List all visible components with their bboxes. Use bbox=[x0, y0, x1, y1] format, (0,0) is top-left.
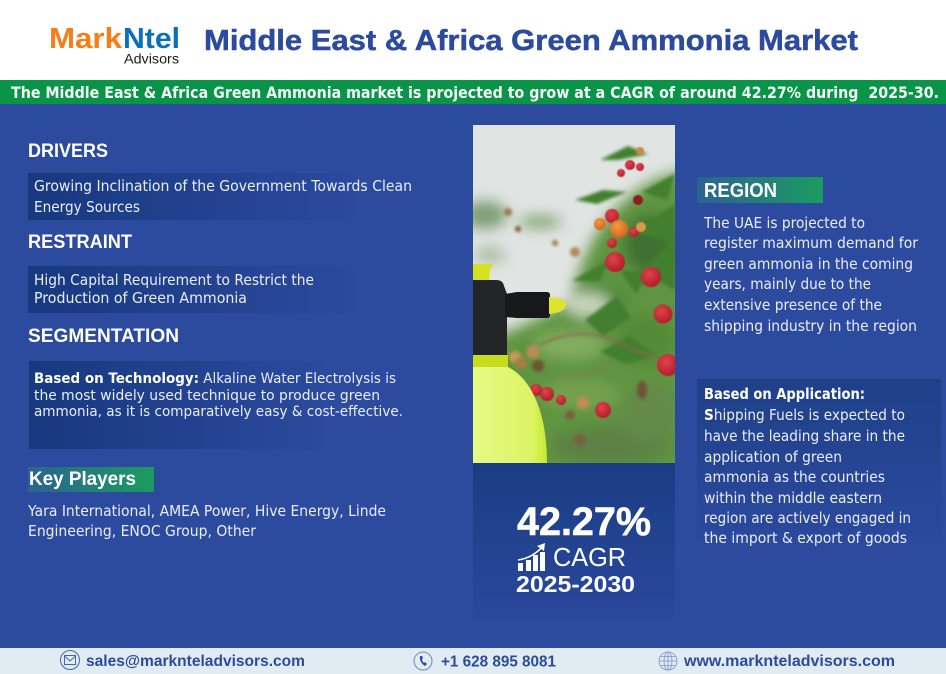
email address: sales@marknteladvisors.com bbox=[86, 653, 305, 670]
region text bbox=[703, 214, 919, 335]
heading: region bbox=[697, 177, 823, 203]
CAGR value: 42.27% bbox=[517, 500, 651, 544]
footer bbox=[0, 648, 946, 674]
title: Middle East & Africa Green Ammonia Market bbox=[204, 25, 858, 57]
panel: region bbox=[697, 177, 919, 335]
segmentation text box: Based on Technology: Alkaline Water Electrolysis is bbox=[34, 371, 396, 387]
logo: MarkNtel Advisors: Mark bbox=[49, 23, 123, 55]
region text: shipping industry in the region bbox=[704, 317, 917, 335]
panel: CAGR stat bbox=[473, 463, 675, 618]
heading: drivers: DRIVERS bbox=[28, 141, 108, 162]
panel: application: have the leading share in the bbox=[704, 427, 905, 445]
restraint text box bbox=[28, 266, 360, 313]
icon: phone bbox=[414, 652, 432, 670]
region text: extensive presence of the bbox=[704, 296, 882, 314]
restraint text box: High Capital Requirement to Restrict the bbox=[34, 271, 314, 289]
panel: application: region are actively engaged in bbox=[704, 509, 911, 527]
icon: email bbox=[60, 650, 80, 670]
region text: years, mainly due to the bbox=[704, 275, 871, 293]
key players list: Yara International, AMEA Power, Hive Energy, Linde bbox=[27, 502, 386, 520]
header band bbox=[0, 0, 946, 80]
segmentation text box: ammonia, as it is comparatively easy & cost-effective. bbox=[34, 404, 403, 420]
key players list bbox=[27, 502, 386, 540]
heading: key players: Key Players bbox=[29, 469, 136, 490]
panel: drivers bbox=[28, 141, 412, 220]
panel: application: application of green bbox=[704, 448, 842, 466]
logo: MarkNtel Advisors: Ntel bbox=[123, 23, 180, 55]
panel: segmentation bbox=[28, 326, 403, 449]
panel: application: within the middle eastern bbox=[704, 489, 882, 507]
drivers text box: Energy Sources bbox=[34, 198, 140, 216]
panel: restraint bbox=[28, 232, 360, 313]
icon: growth chart bbox=[518, 543, 545, 571]
panel: key players bbox=[27, 467, 386, 540]
region text: green ammonia in the coming bbox=[704, 255, 913, 273]
heading: restraint: RESTRAINT bbox=[28, 232, 132, 253]
segmentation text box bbox=[29, 361, 403, 449]
heading: segmentation: SEGMENTATION bbox=[28, 326, 179, 347]
drivers text box bbox=[28, 173, 412, 220]
phone number: +1 628 895 8081 bbox=[441, 654, 556, 670]
panel: application: Shipping Fuels is expected to bbox=[704, 406, 905, 424]
drivers text box: Growing Inclination of the Government Towards Clean bbox=[34, 177, 412, 195]
region text: The UAE is projected to bbox=[703, 214, 865, 232]
panel: application: the import & export of goods bbox=[704, 529, 907, 547]
sprayer bottle bbox=[473, 264, 566, 463]
CAGR label: CAGR bbox=[553, 542, 626, 572]
logo: MarkNtel Advisors: Advisors bbox=[124, 50, 179, 66]
website: www.marknteladvisors.com bbox=[683, 653, 895, 670]
segmentation text box: the most widely used technique to produce green bbox=[34, 388, 380, 404]
restraint text box: Production of Green Ammonia bbox=[34, 289, 247, 307]
heading: region: REGION bbox=[704, 180, 777, 202]
logo: MarkNtel Advisors bbox=[49, 23, 180, 66]
icon: globe bbox=[659, 652, 677, 670]
panel: application bbox=[697, 379, 941, 550]
panel: application: ammonia as the countries bbox=[704, 468, 885, 486]
CAGR period: 2025-2030 bbox=[516, 571, 635, 597]
panel: application: Based on Application: bbox=[704, 385, 865, 403]
photo: sprayer bottle and berries bbox=[473, 125, 675, 463]
region text: register maximum demand for bbox=[704, 234, 919, 252]
key players list: Engineering, ENOC Group, Other bbox=[28, 522, 257, 540]
